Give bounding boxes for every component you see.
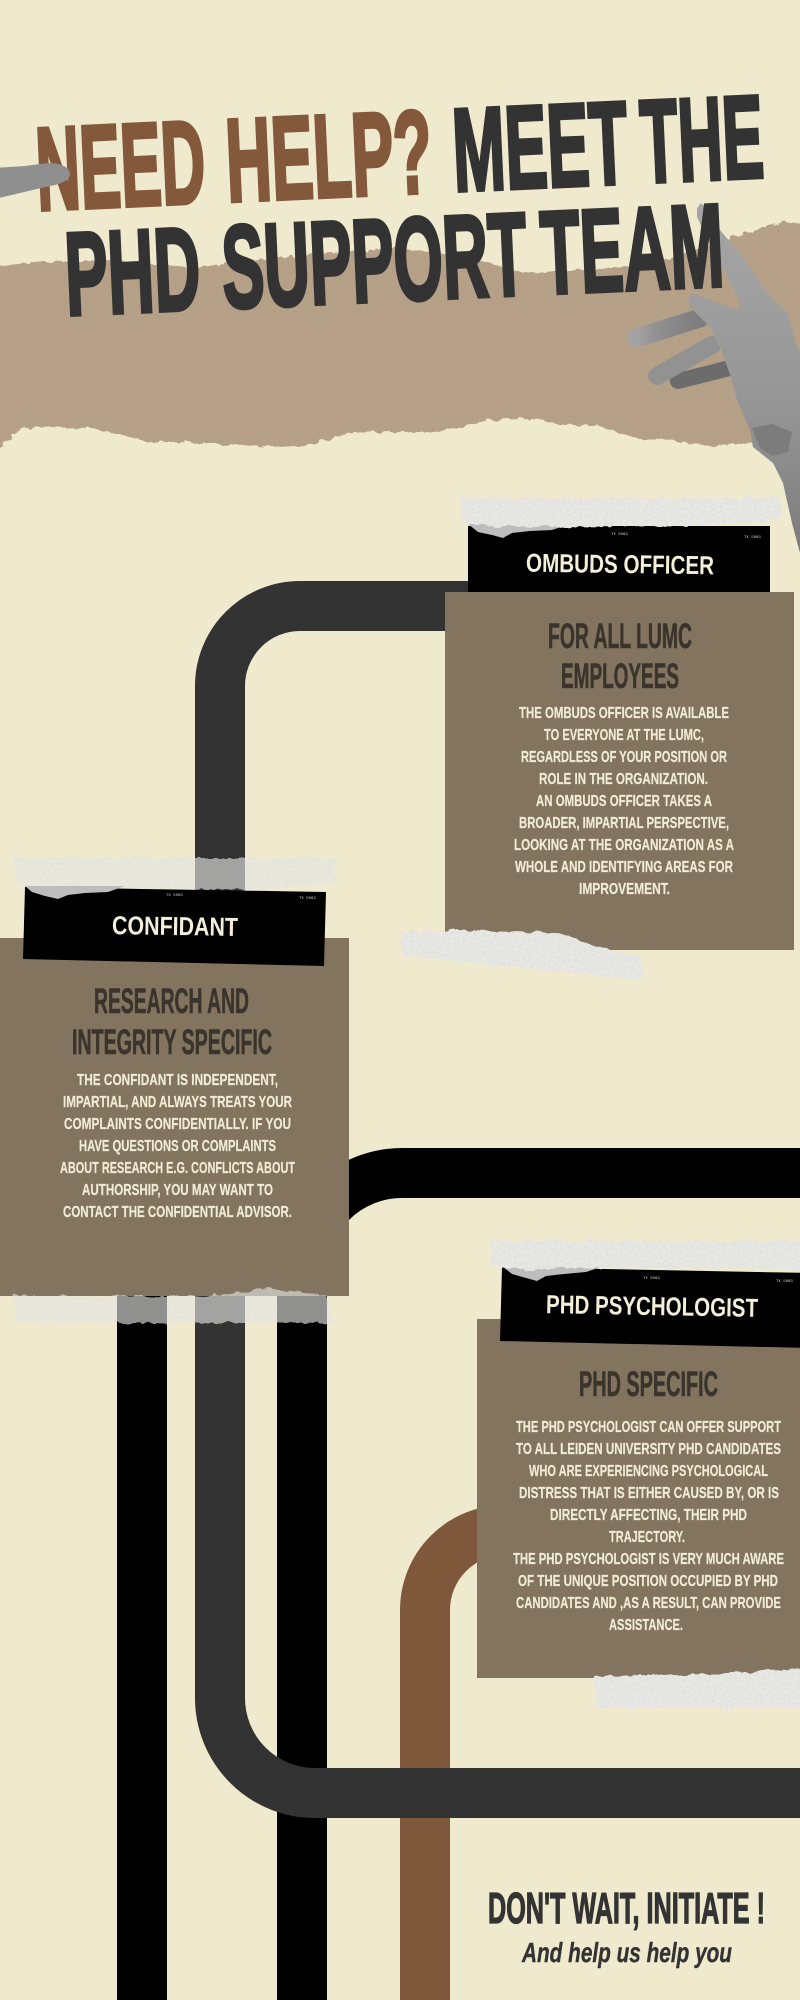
pipe: dark grey main [220, 606, 800, 1793]
card: ombuds officer [445, 592, 794, 950]
title [33, 71, 766, 341]
label strip: ombuds officer: TX 5063 [744, 536, 761, 540]
panel: confidant [0, 858, 349, 1323]
body text: ombuds officer: IMPROVEMENT. [579, 881, 670, 898]
body text: ombuds officer [514, 705, 734, 898]
label strip: phd psychologist: TX 5063 [643, 1277, 660, 1281]
pipe: brown [425, 1530, 520, 2000]
finger: middle [657, 345, 712, 376]
body text: phd psychologist: ASSISTANCE. [609, 1617, 683, 1634]
finger: lowest, shadowed [678, 368, 730, 381]
heading: research and integrity specific: RESEARCH AND [94, 982, 249, 1021]
title line 2: SUPPORT [219, 189, 530, 334]
tape: confidant bottom [15, 1288, 334, 1323]
body text: phd psychologist [513, 1419, 784, 1634]
tape: psychologist top [491, 1241, 800, 1270]
subheading: and help us help you: And help us help you [521, 1937, 732, 1968]
label strip: confidant: TX 5063 [166, 894, 183, 898]
body text: confidant: IMPARTIAL, AND ALWAYS TREATS YOUR [63, 1094, 292, 1111]
title line 1: MEET [450, 77, 630, 217]
card: phd psychologist [477, 1319, 800, 1678]
tape: ombuds bottom [401, 930, 642, 980]
pipe: black vertical left [117, 1290, 167, 2000]
pipe: black right vertical turning right [302, 1173, 800, 2000]
tape: psychologist bottom [594, 1668, 800, 1708]
body text: ombuds officer: ROLE IN THE ORGANIZATION. [539, 771, 708, 788]
panel: ombuds officer [401, 498, 794, 980]
label strip: ombuds officer: TX 5063 [611, 533, 628, 537]
icon: right pointing hand [637, 203, 800, 580]
label strip: ombuds officer: OMBUDS OFFICER [526, 548, 714, 580]
heading: for all lumc employees: EMPLOYEES [561, 657, 679, 696]
label strip: phd psychologist: TX 5063 [776, 1280, 793, 1284]
body text: confidant: THE CONFIDANT IS INDEPENDENT, [77, 1072, 278, 1089]
body text: confidant: HAVE QUESTIONS OR COMPLAINTS [79, 1138, 276, 1155]
body text: confidant: CONTACT THE CONFIDENTIAL ADVISOR. [63, 1204, 292, 1221]
body text: confidant: AUTHORSHIP, YOU MAY WANT TO [82, 1182, 273, 1199]
label strip: ombuds officer [468, 524, 770, 592]
palm, index finger and arm [688, 203, 800, 580]
title line 1: NEED [33, 97, 208, 236]
title line 2: PHD [62, 203, 203, 341]
body text: confidant [60, 1072, 295, 1221]
tape: ombuds top [460, 498, 780, 528]
body text: ombuds officer: AN OMBUDS OFFICER TAKES A [536, 793, 712, 810]
title line 1: HELP? [223, 86, 435, 227]
panel: phd psychologist [477, 1241, 800, 1708]
label strip: confidant: CONFIDANT [112, 910, 238, 942]
label strip: confidant [23, 886, 326, 966]
finger: upper pointing left [637, 318, 700, 338]
heading: research and integrity specific: INTEGRITY SPECIFIC [72, 1023, 272, 1062]
heading: for all lumc employees [548, 617, 692, 696]
footer: call to action [488, 1884, 765, 1968]
body text: ombuds officer: TO EVERYONE AT THE LUMC, [544, 727, 704, 744]
body text: confidant: COMPLAINTS CONFIDENTIALLY. IF YOU [64, 1116, 291, 1133]
title line 1 [33, 71, 766, 236]
body text: confidant: ABOUT RESEARCH E.G. CONFLICTS ABOUT [60, 1160, 295, 1177]
body text: phd psychologist: TRAJECTORY. [609, 1529, 685, 1546]
title line 2 [62, 180, 726, 341]
label strip: phd psychologist [500, 1266, 800, 1348]
palm shadow [752, 424, 792, 456]
torn kraft paper band [0, 222, 800, 470]
icon: left pointing hand [0, 163, 70, 199]
card: confidant [0, 938, 349, 1296]
heading: research and integrity specific [72, 982, 272, 1062]
label strip: confidant: TX 5063 [299, 897, 316, 901]
tape: confidant top [15, 858, 335, 890]
